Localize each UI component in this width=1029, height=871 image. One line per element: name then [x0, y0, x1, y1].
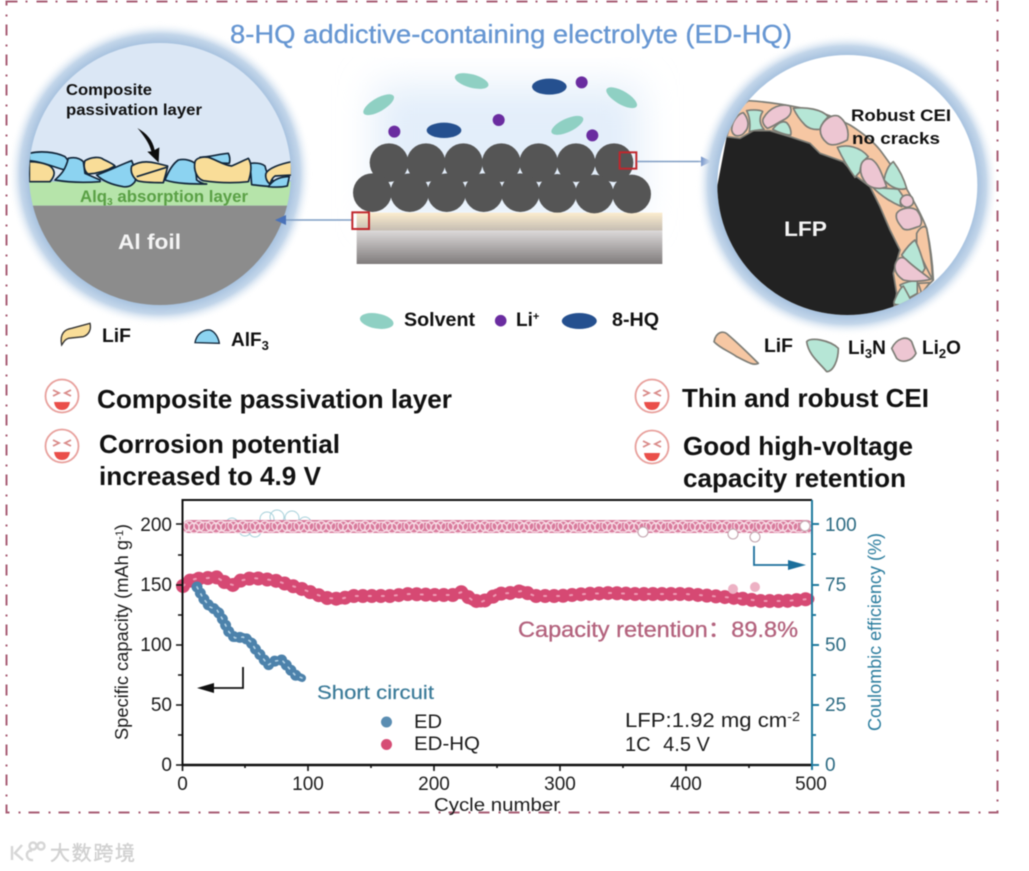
legend: ED and ED-HQ: ED: [414, 712, 442, 733]
right axis tick labels: [825, 515, 857, 776]
legend: solvent, Li+, 8-HQ: 8-HQ: [612, 310, 659, 331]
foil layers: [357, 213, 662, 264]
icon: laughing face: [636, 430, 668, 464]
axis title: specific capacity: ): [112, 524, 132, 530]
right axis tick labels: 100: [825, 515, 857, 536]
bottom axis tick labels: [177, 774, 827, 795]
bullet: corrosion potential: [46, 429, 340, 491]
bottom axis tick labels: 300: [544, 774, 576, 795]
legend: LiF and AlF3: AlF: [231, 330, 262, 351]
label: Alq3 absorption layer: Alq: [80, 188, 107, 206]
bullet: corrosion potential: Corrosion potential: [99, 429, 340, 459]
icon: laughing face: [46, 380, 78, 412]
LFP particle: [713, 131, 900, 320]
annotation: test conditions: -2: [787, 709, 800, 724]
watermark: [12, 837, 135, 866]
legend: LiF and AlF3: 3: [262, 338, 269, 353]
icon: laughing face: [46, 430, 78, 462]
bottom axis tick labels: 400: [670, 774, 702, 795]
icon: watermark logo: [12, 842, 44, 860]
legend: LiF, Li3N, Li2O: 2: [939, 346, 946, 361]
label: composite passivation layer: Composite: [66, 82, 152, 99]
active material particles: [353, 143, 651, 213]
LiF band: [727, 101, 933, 307]
bullet: good high-voltage capacity retention: capacity retention: [683, 463, 906, 493]
legend: LiF, Li3N, Li2O: 3: [865, 346, 872, 361]
legend: LiF, Li3N, Li2O: N: [872, 338, 886, 359]
right axis tick labels: 0: [825, 755, 836, 776]
panel: central electrode schematic: [352, 70, 662, 264]
right axis tick labels: 25: [825, 695, 846, 716]
arrow: to Al foil circle: [275, 215, 352, 225]
left axis tick labels: 150: [140, 575, 172, 596]
legend: LiF, Li3N, Li2O: Li: [922, 338, 939, 359]
axis title: cycle number: Cycle number: [434, 795, 560, 815]
arrow: series to left axis: [197, 667, 243, 693]
8-HQ molecules: [427, 79, 567, 138]
left axis tick labels: 200: [140, 515, 172, 536]
legend: LiF, Li3N, Li2O: [714, 332, 961, 372]
icon: laughing face: [636, 380, 668, 412]
Li+ ions: [388, 76, 598, 141]
bottom axis tick labels: 500: [795, 774, 827, 795]
legend: LiF, Li3N, Li2O: LiF: [764, 336, 793, 357]
left axis tick labels: [140, 515, 172, 776]
left axis tick labels: 100: [140, 635, 172, 656]
legend: solvent, Li+, 8-HQ: Li: [516, 310, 533, 331]
bullet: good high-voltage capacity retention: [636, 430, 913, 493]
annotation: test conditions: 1C 4.5 V: [625, 734, 710, 756]
label: Alq3 absorption layer: absorption layer: [113, 188, 249, 206]
bullet: thin and robust CEI: Thin and robust CEI: [682, 383, 929, 413]
bottom axis tick labels: 100: [292, 774, 324, 795]
legend: solvent, Li+, 8-HQ: [359, 310, 659, 331]
left axis tick labels: 50: [151, 695, 172, 716]
panel: LFP CEI zoom circle: [696, 34, 998, 336]
axis title: specific capacity: -1: [114, 530, 126, 540]
legend: ED and ED-HQ: ED-HQ: [414, 734, 480, 755]
bottom axis tick labels: 0: [177, 774, 188, 795]
ED-HQ capacity series: [183, 577, 809, 602]
label: robust CEI no cracks: Robust CEI: [851, 106, 951, 125]
legend: LiF, Li3N, Li2O: O: [946, 338, 961, 359]
red zoom boxes: [352, 152, 636, 229]
bullet: corrosion potential: increased to 4.9 V: [99, 461, 322, 491]
legend: ED and ED-HQ: [381, 712, 480, 755]
panel: Al foil zoom circle: passivation layer: [66, 102, 202, 119]
bullet: good high-voltage capacity retention: Good high-voltage: [683, 431, 913, 461]
panel: Al foil zoom circle: [8, 22, 312, 326]
panel: LFP CEI zoom circle: no cracks: [852, 129, 940, 148]
watermark: 大数跨境: [50, 837, 135, 866]
annotation: capacity retention: Capacity retention：89.8%: [518, 617, 798, 642]
left axis tick labels: 0: [161, 755, 172, 776]
title: 8-HQ addictive-containing electrolyte (ED-HQ): [230, 19, 792, 49]
legend: LiF and AlF3: [61, 323, 269, 353]
bullet: composite passivation layer: Composite passivation layer: [97, 384, 452, 414]
solvent molecules: [360, 70, 640, 139]
legend: LiF and AlF3: LiF: [102, 326, 131, 347]
ED capacity series: [197, 587, 302, 678]
axis title: coulombic efficiency: Coulombic efficiency (%): [865, 533, 885, 731]
legend: LiF, Li3N, Li2O: Li: [848, 338, 865, 359]
label: LFP: LFP: [784, 218, 827, 241]
arrow: to CEI circle: [637, 156, 712, 166]
label: Al foil: Al foil: [118, 231, 181, 254]
right axis tick labels: 75: [825, 575, 846, 596]
right axis tick labels: 50: [825, 635, 846, 656]
annotation: short circuit: Short circuit: [317, 682, 435, 704]
axes: left, top, bottom: [176, 500, 812, 771]
arrow: series to right axis: [754, 546, 806, 570]
label: Alq3 absorption layer: 3: [107, 197, 113, 208]
coulombic efficiency series (rings): [183, 510, 812, 542]
legend: solvent, Li+, 8-HQ: +: [533, 311, 539, 323]
axis: right coulombic efficiency: [812, 500, 819, 770]
annotation: test conditions: LFP:1.92 mg cm: [625, 710, 772, 732]
legend: solvent, Li+, 8-HQ: Solvent: [404, 310, 476, 331]
axis title: specific capacity: Specific capacity (mAh g: [112, 543, 132, 740]
bottom axis tick labels: 200: [418, 774, 450, 795]
chart: cycling performance: [112, 500, 885, 815]
annotation: test conditions: [625, 709, 800, 756]
